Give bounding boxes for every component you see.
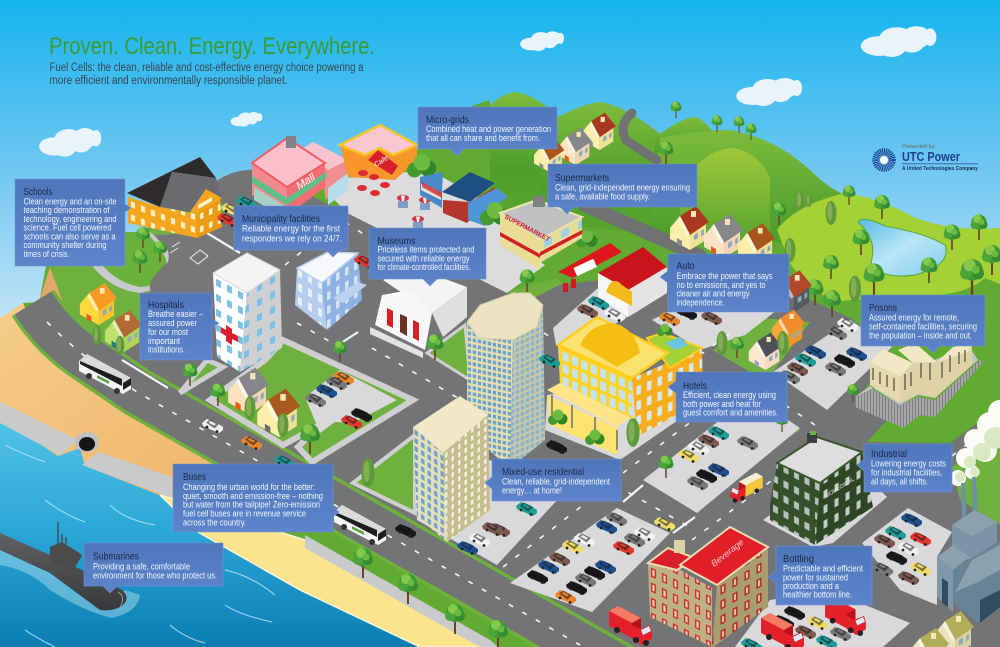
delivery trucks bbox=[609, 473, 866, 647]
callout: submarines: Providing a safe, comfortable bbox=[93, 561, 190, 571]
callout: supermarkets bbox=[548, 164, 697, 214]
callout: schools: times of crisis. bbox=[24, 249, 70, 259]
industrial building: BIOMEDICAL bbox=[824, 477, 856, 500]
micro-grid shop bbox=[407, 154, 509, 226]
callout: hospitals: Breathe easier – bbox=[148, 309, 203, 319]
callout: bottling: healthier bottom line. bbox=[783, 589, 852, 599]
callout: buses: Buses bbox=[183, 471, 206, 483]
callout: industrial: for industrial facilities, bbox=[871, 467, 942, 477]
callout: micro-grids: that all can share and benefit from. bbox=[426, 133, 540, 143]
callout: mixed-use residential: energy… at home! bbox=[502, 485, 562, 495]
callout: schools: Schools bbox=[24, 186, 52, 198]
callout: buses: across the country. bbox=[183, 517, 246, 527]
sea walls and tunnel bbox=[0, 402, 172, 498]
callout: hotels bbox=[668, 372, 787, 422]
callout: submarines: Submarines bbox=[93, 550, 139, 562]
green lawn around school bbox=[93, 232, 176, 293]
callout: mixed-use residential bbox=[485, 459, 621, 501]
callout: submarines: environment for those who protect us. bbox=[93, 570, 217, 580]
bus near beach bbox=[334, 505, 386, 545]
callout: hotels: Efficient, clean energy using bbox=[683, 390, 776, 400]
subtitle: Fuel Cells: the clean, reliable and cost-effective energy choice powering a bbox=[50, 62, 364, 74]
callout: buses: but water from the tailpipe! Zero-emission bbox=[183, 499, 320, 509]
tower bbox=[467, 293, 545, 468]
callout: municipality facilities: Municipality facilities bbox=[242, 213, 320, 225]
callout: auto bbox=[660, 254, 789, 312]
logo: UTC Power: UTC Power bbox=[902, 149, 960, 164]
title: Proven. Clean. Energy. Everywhere. bbox=[49, 33, 375, 60]
plaza bbox=[325, 170, 545, 293]
callout: hospitals: for our most bbox=[148, 327, 188, 337]
city trees bbox=[93, 227, 859, 647]
callout: buses bbox=[173, 464, 339, 532]
callout: bottling: Predictable and efficient bbox=[783, 563, 863, 573]
logo: UTC Power: A United Technologies Company bbox=[902, 166, 978, 172]
callout: auto: no to emissions, and yes to bbox=[676, 280, 766, 290]
hill road and road to houses bbox=[585, 113, 700, 256]
callout: schools: teaching demonstration of bbox=[24, 205, 110, 215]
callout: hospitals: assured power bbox=[148, 318, 197, 328]
supermarket bbox=[500, 196, 597, 270]
callout: schools: community shelter during bbox=[24, 240, 106, 250]
callout: bottling: production and a bbox=[783, 581, 839, 591]
water ripples bbox=[5, 445, 275, 647]
callout: bottling: power for sustained bbox=[783, 572, 848, 582]
callout: prisons bbox=[861, 295, 985, 353]
municipal building bbox=[295, 252, 367, 330]
callout: prisons: the population – inside and out. bbox=[869, 330, 972, 340]
gas station bbox=[558, 243, 667, 317]
callout: hospitals: important bbox=[148, 336, 180, 346]
factory with smoke bbox=[937, 400, 1000, 623]
green blocks bbox=[180, 278, 1000, 525]
callout: municipality facilities bbox=[234, 206, 348, 257]
plaza tables and umbrellas bbox=[357, 170, 431, 229]
coastal road bbox=[33, 303, 625, 647]
trees on hills and lawn bbox=[658, 102, 1000, 317]
houses near the road and bottom corner bbox=[80, 283, 974, 647]
callout: auto: Auto bbox=[676, 260, 695, 272]
callout: industrial bbox=[857, 444, 952, 492]
clouds bbox=[39, 26, 936, 157]
callout: supermarkets: Supermarkets bbox=[555, 172, 609, 184]
mall bbox=[252, 136, 348, 218]
callout: hotels: Hotels bbox=[683, 380, 707, 392]
callout: auto: Embrace the power that says bbox=[676, 271, 773, 281]
callout: industrial: Lowering energy costs bbox=[871, 458, 946, 468]
houses on the hill bbox=[534, 113, 812, 370]
callout: municipality facilities: responders we rely on 24/7. bbox=[242, 233, 342, 243]
callout: museums: for climate-controlled facilities. bbox=[378, 262, 470, 272]
callout: bottling: Bottling bbox=[783, 553, 814, 565]
callout: prisons: Assured energy for remote, bbox=[869, 312, 959, 322]
callout: buses: Changing the urban world for the better: bbox=[183, 482, 315, 492]
callout: auto: cleaner air and energy bbox=[676, 289, 750, 299]
callout: museums: Priceless items protected and bbox=[378, 245, 474, 255]
industrial building bbox=[770, 431, 873, 545]
prison bbox=[855, 343, 983, 428]
callout: museums: secured with reliable energy bbox=[378, 254, 470, 264]
callout: industrial: Industrial bbox=[871, 448, 907, 460]
cars bbox=[202, 196, 931, 647]
callout: hotels: guest comfort and amenities. bbox=[683, 407, 778, 417]
callout: prisons: Prisons bbox=[869, 302, 897, 314]
callout: supermarkets: Clean, grid-independent energy ensuring bbox=[555, 182, 690, 192]
callout: municipality facilities: Reliable energy for the first bbox=[242, 224, 340, 234]
bus on coast road bbox=[79, 354, 131, 394]
subtitle: more efficient and environmentally responsible planet. bbox=[50, 75, 288, 87]
callout: industrial: all days, all shifts. bbox=[871, 476, 928, 486]
roadside sidewalk and green strip bbox=[305, 535, 498, 647]
submarine bbox=[0, 522, 140, 618]
bottling plant bbox=[648, 527, 768, 647]
callout: schools: schools can also serve as a bbox=[24, 232, 116, 242]
callout: micro-grids bbox=[418, 107, 557, 156]
logo: UTC Power: Presented by: bbox=[902, 144, 936, 150]
callout: micro-grids: Combined heat and power generation bbox=[426, 124, 551, 134]
mixed-use residential building bbox=[413, 396, 490, 542]
museum bbox=[370, 268, 467, 358]
callout: hotels: both power and heat for bbox=[683, 399, 761, 409]
callout: auto: independence. bbox=[676, 297, 724, 307]
callout: hospitals: institutions. bbox=[148, 344, 185, 354]
callout: schools bbox=[15, 179, 131, 266]
callout: buses: fuel cell buses are in revenue service bbox=[183, 508, 306, 518]
school building bbox=[127, 157, 222, 238]
callout: bottling bbox=[768, 546, 872, 605]
callout: submarines bbox=[84, 543, 223, 593]
ocean bbox=[0, 418, 425, 647]
hospital bbox=[213, 253, 282, 372]
school lot bbox=[150, 233, 240, 292]
bottling plant: Beverage bbox=[709, 537, 746, 569]
cliff sand bbox=[0, 267, 235, 510]
supermarket: SUPERMARKET bbox=[503, 214, 551, 243]
logo: UTC Power bbox=[876, 144, 978, 172]
road markings bbox=[47, 222, 998, 645]
cafe bbox=[340, 125, 417, 180]
callout: mixed-use residential: Mixed-use residential bbox=[502, 466, 584, 478]
callout: schools: technology, engineering and bbox=[24, 214, 116, 224]
callout: supermarkets: a safe, available food supply. bbox=[555, 191, 650, 201]
city road network bbox=[120, 170, 1000, 647]
parking lots bbox=[305, 288, 952, 647]
callout: museums: Museums bbox=[378, 235, 416, 247]
callout: buses: quiet, smooth and emission-free – nothing bbox=[183, 491, 323, 501]
beach bbox=[160, 495, 485, 647]
callout: micro-grids: Micro-grids bbox=[426, 114, 469, 126]
subtitle bbox=[50, 62, 364, 87]
mall: Mall bbox=[294, 171, 318, 193]
callout: hospitals: Hospitals bbox=[148, 299, 184, 311]
callout: schools: science. Fuel cell powered bbox=[24, 223, 112, 233]
callout: hospitals bbox=[140, 293, 219, 360]
cafe: Cafe bbox=[373, 155, 390, 169]
callout: prisons: self-contained facilities, securing bbox=[869, 321, 977, 331]
pond bbox=[858, 219, 946, 276]
callout: schools: Clean energy and an on-site bbox=[24, 196, 116, 206]
callout: museums bbox=[369, 228, 486, 286]
hotel bbox=[547, 317, 703, 455]
callout: mixed-use residential: Clean, reliable, grid-independent bbox=[502, 476, 610, 486]
